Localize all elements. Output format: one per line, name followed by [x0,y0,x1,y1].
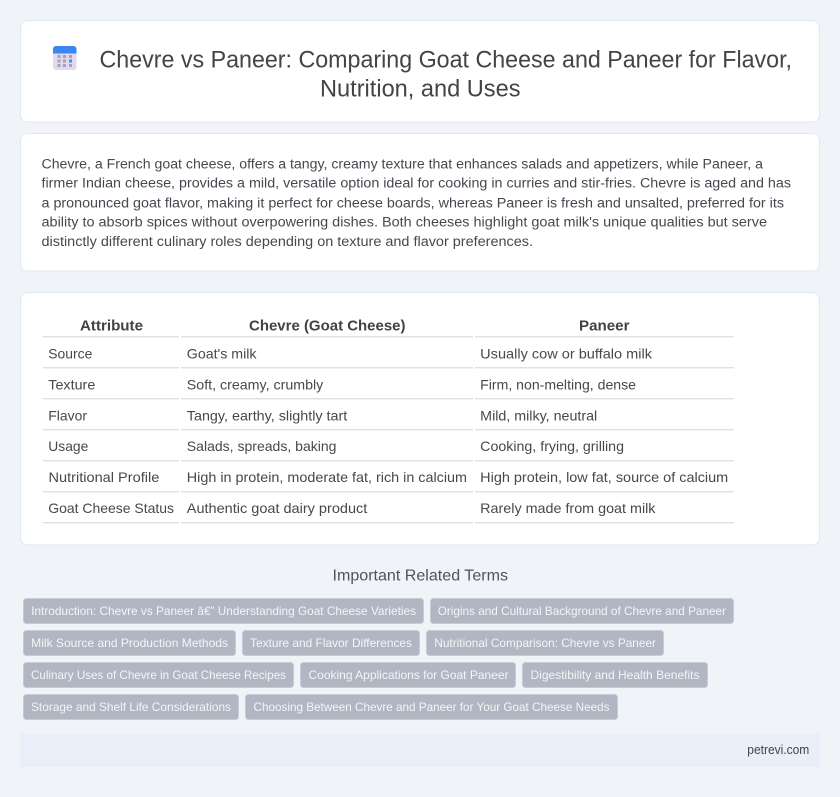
text block: introduction paragraph: Chevre, a French goat cheese, offers a tangy, creamy texture that enhances salads and appetizers, while Paneer, a [42,156,763,172]
panel: related term tags [24,598,734,720]
table row: usage: Usage [48,438,89,454]
table row: flavor: Flavor [48,407,87,423]
text block: introduction paragraph: distinctly different culinary roles depending on texture and flavor preferences. [42,234,533,250]
table row: usage [48,438,624,454]
tag: origins: Origins and Cultural Background of Chevre and Paneer [438,604,726,618]
tag: milk source [24,630,236,656]
table row: source: Source [48,345,93,361]
icon: calendar [53,46,76,70]
footer source text: petrevi.com [747,743,809,757]
table row: goat cheese status [48,500,657,516]
table header row: Attribute [80,319,143,335]
tag: choosing: Choosing Between Chevre and Paneer for Your Goat Cheese Needs [254,700,610,714]
tag: cooking applications [300,662,516,688]
table row: nutritional profile: High in protein, moderate fat, rich in calcium [187,469,467,485]
table row: goat cheese status: Rarely made from goat milk [480,500,657,516]
table header row [80,319,630,335]
table row: source: Usually cow or buffalo milk [480,345,653,361]
text block: introduction paragraph: a pronounced goat flavor, making it perfect for cheese boards, whereas Paneer is fresh and unsalted, preferred for its [42,196,784,212]
footer [20,734,820,767]
panel: header [20,20,820,122]
tag: texture and flavor: Texture and Flavor Differences [250,636,412,650]
tag: nutritional comparison [426,630,664,656]
tag: digestibility: Digestibility and Health Benefits [530,668,700,682]
table row: texture [48,376,636,392]
table row: texture: Firm, non-melting, dense [480,376,636,392]
heading: important related terms: Important Related Terms [332,568,508,585]
title [100,47,792,102]
table row: source: Goat's milk [187,345,258,361]
table row: goat cheese status: Authentic goat dairy product [187,500,367,516]
table row: nutritional profile: Nutritional Profile [48,469,160,485]
table row: goat cheese status: Goat Cheese Status [48,500,174,516]
table row: flavor: Tangy, earthy, slightly tart [187,407,347,423]
table header row: Chevre (Goat Cheese) [249,319,406,335]
title: Nutrition, and Uses [320,75,520,102]
table row: flavor [48,407,597,423]
tag: culinary uses: Culinary Uses of Chevre in Goat Cheese Recipes [31,668,286,682]
text block: introduction paragraph: ability to absorb spices without overpowering dishes. Both cheeses highlight goat milk's unique qualities but serve [42,215,767,231]
tag: introduction: Introduction: Chevre vs Paneer â€” Understanding Goat Cheese Varieties [31,604,416,618]
table row: usage: Cooking, frying, grilling [480,438,624,454]
table header row: Paneer [579,319,630,335]
table row: nutritional profile: High protein, low fat, source of calcium [480,469,728,485]
tag: origins [430,598,734,624]
panel: comparison table [20,292,820,545]
tag: milk source: Milk Source and Production Methods [31,636,228,650]
tag: cooking applications: Cooking Applications for Goat Paneer [308,668,508,682]
tag: choosing [246,694,618,720]
tag: introduction [24,598,424,624]
tag: texture and flavor [242,630,420,656]
tag: digestibility [522,662,708,688]
tag: storage: Storage and Shelf Life Considerations [31,700,231,714]
table row: usage: Salads, spreads, baking [187,438,336,454]
title: Chevre vs Paneer: Comparing Goat Cheese and Paneer for Flavor, [100,47,792,74]
text block: introduction paragraph [42,156,791,250]
table row: flavor: Mild, milky, neutral [480,407,597,423]
tag: nutritional comparison: Nutritional Comparison: Chevre vs Paneer [434,636,656,650]
table row: texture: Soft, creamy, crumbly [187,376,323,392]
panel: introduction [20,134,820,271]
text block: introduction paragraph: firmer Indian cheese, provides a mild, versatile option ideal for cooking in curries and stir-fries. Chevre is aged and has [42,176,791,192]
tag: culinary uses [24,662,294,688]
table row: source [48,345,653,361]
table row: texture: Texture [48,376,96,392]
tag: storage [24,694,238,720]
table row: nutritional profile [48,469,728,485]
